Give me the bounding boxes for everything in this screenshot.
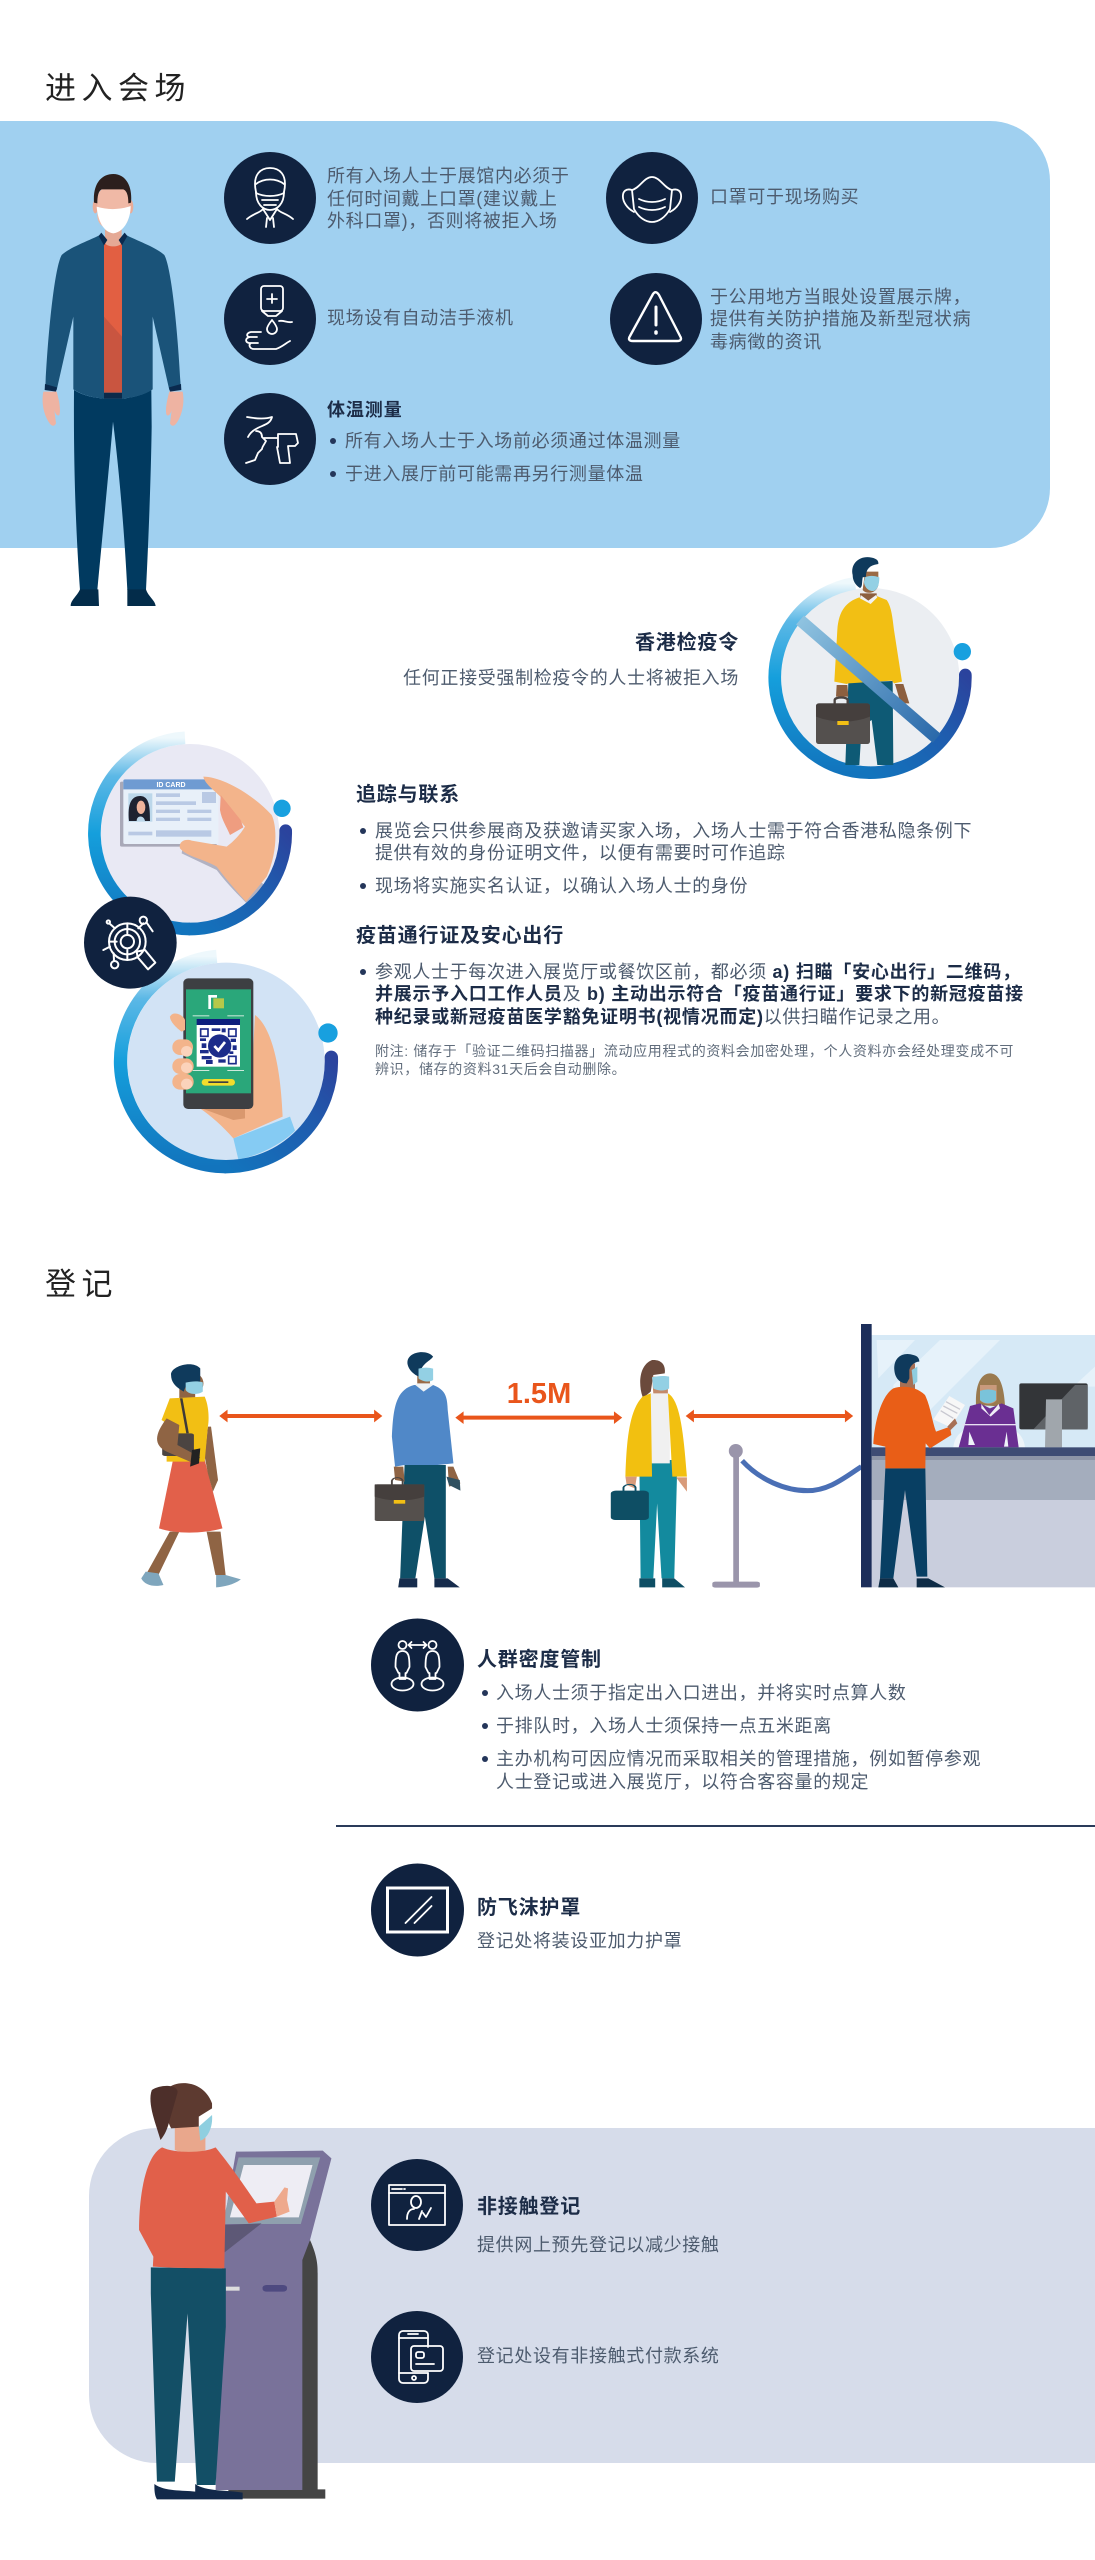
heading: sneeze guard: 防飞沫护罩 xyxy=(477,1896,581,1919)
distance arrows xyxy=(219,1410,853,1424)
bullet list: temperature xyxy=(330,431,681,484)
bullet list: tracing: 提供有效的身份证明文件，以便有需要时可作追踪 xyxy=(375,843,786,863)
item: masks on sale xyxy=(606,152,859,244)
figure: man with briefcase xyxy=(375,1352,460,1587)
icon: face and thermometer xyxy=(224,393,316,485)
bullet list: vaccine pass xyxy=(360,962,1024,1027)
icon: browser with person xyxy=(371,2159,463,2251)
icon: warning triangle xyxy=(610,273,702,365)
icon: surgical mask xyxy=(606,152,698,244)
text: masks purchasable: 口罩可于现场购买 xyxy=(710,187,859,207)
bullet list: vaccine pass: 参观人士于每次进入展览厅或餐饮区前，都必须 xyxy=(375,962,773,982)
section: tracing and contact xyxy=(356,782,1024,1077)
bullet list: tracing xyxy=(360,821,972,896)
text: sanitizer provided: 现场设有自动洁手液机 xyxy=(327,308,514,328)
bullet list: vaccine pass: 及 b) 主动出示符合「疫苗通行证」要求下的新冠疫苗接 xyxy=(563,984,1024,1004)
text: notices: 于公用地方当眼处设置展示牌， xyxy=(710,287,971,307)
text: online pre-registration: 提供网上预先登记以减少接触 xyxy=(477,2235,720,2255)
heading: tracing: 追踪与联系 xyxy=(356,782,460,806)
heading: vaccine pass: 疫苗通行证及安心出行 xyxy=(356,923,564,947)
illustration: quarantine no-entry man xyxy=(775,557,971,773)
bullet list: temperature: 所有入场人士于入场前必须通过体温测量 xyxy=(345,431,681,451)
item: crowd density xyxy=(371,1618,981,1792)
heading: registration: 登记 xyxy=(45,1267,118,1302)
text: notices: 毒病徵的资讯 xyxy=(710,332,822,352)
icon: protective screen xyxy=(371,1864,464,1956)
figure: receptionist xyxy=(953,1373,1025,1447)
item: sneeze guard xyxy=(371,1864,682,1956)
illustration: ID card and QR scan circles xyxy=(84,738,338,1167)
bullet list: temperature: 于进入展厅前可能需再另行测量体温 xyxy=(345,464,644,484)
text: quarantine rule: 任何正接受强制检疫令的人士将被拒入场 xyxy=(403,668,739,688)
bullet list: tracing: 现场将实施实名认证，以确认入场人士的身份 xyxy=(375,876,748,896)
icon: phone and card xyxy=(371,2311,463,2403)
kiosk xyxy=(216,2151,331,2499)
booth pillar xyxy=(861,1324,872,1587)
text: contactless payment: 登记处设有非接触式付款系统 xyxy=(477,2346,720,2366)
item: hand sanitizer xyxy=(224,273,514,365)
illustration: ID card circle: ID CARD xyxy=(156,782,186,789)
heading: HK quarantine: 香港检疫令 xyxy=(635,630,739,654)
icon: person with mask xyxy=(224,152,316,244)
illustration: standing man in mask xyxy=(43,174,183,606)
illustration: registration counter xyxy=(861,1324,1095,1587)
bullet list: vaccine pass: 以供扫瞄作记录之用。 xyxy=(764,1007,950,1027)
panel: contactless xyxy=(89,2128,1095,2463)
heading: enter venue: 进入会场 xyxy=(45,71,191,106)
bullet list: crowd control: 人士登记或进入展览厅，以符合客容量的规定 xyxy=(496,1772,869,1792)
heading: contactless registration: 非接触登记 xyxy=(477,2195,581,2218)
text: temperature heading: 体温测量 xyxy=(327,400,403,420)
monitor xyxy=(1019,1383,1088,1447)
text: notices: 提供有关防护措施及新型冠状病 xyxy=(710,309,971,329)
bullet list: vaccine pass: 种纪录或新冠疫苗医学豁免证明书(视情况而定) xyxy=(375,1006,764,1027)
illustration: ID card circle xyxy=(94,738,291,929)
illustration: woman at kiosk xyxy=(139,2083,331,2499)
item: temperature check xyxy=(224,393,681,485)
bullet list: crowd control: 于排队时，入场人士须保持一点五米距离 xyxy=(496,1716,832,1736)
text: mask rule: 外科口罩)，否则将被拒入场 xyxy=(327,211,558,231)
text: mask rule: 任何时间戴上口罩(建议戴上 xyxy=(327,189,558,209)
illustration: queue with social distancing xyxy=(141,1352,861,1588)
item: online registration xyxy=(371,2159,720,2255)
bullet list: tracing: 展览会只供参展商及获邀请买家入场，入场人士需于符合香港私隐条例下 xyxy=(375,821,972,841)
item: face mask required xyxy=(224,152,570,244)
stanchion with rope xyxy=(712,1444,861,1588)
panel: entry measures xyxy=(0,121,1050,548)
bullet list: crowd control: 主办机构可因应情况而采取相关的管理措施，例如暂停参观 xyxy=(496,1749,981,1769)
item: notices xyxy=(610,273,971,365)
bullet list: vaccine pass: 并展示予入口工作人员 xyxy=(375,983,563,1004)
text: mask rule: 所有入场人士于展馆内必须于 xyxy=(327,166,570,186)
text: footnote: 辨识，储存的资料31天后会自动删除。 xyxy=(375,1061,626,1077)
bullet list: crowd control xyxy=(482,1683,981,1792)
counter xyxy=(872,1447,1095,1587)
item: contactless payment xyxy=(371,2311,720,2403)
icon: two people at distance xyxy=(371,1618,464,1712)
figure: woman walking xyxy=(141,1364,241,1587)
figure: woman in yellow cardigan xyxy=(611,1360,687,1587)
label: 1.5M distance: 1.5M xyxy=(507,1378,571,1410)
icon: contact tracing xyxy=(84,897,177,989)
heading: crowd control: 人群密度管制 xyxy=(477,1647,602,1671)
illustration: QR phone circle xyxy=(121,956,338,1167)
text: sneeze guard: 登记处将装设亚加力护罩 xyxy=(477,1931,682,1951)
text: footnote: 附注: 储存于「验证二维码扫描器」流动应用程式的资料会加密处理，个人资料亦会经处理变成不可 xyxy=(375,1043,1014,1059)
figure: woman xyxy=(139,2083,290,2499)
text: HK quarantine xyxy=(403,630,739,688)
bullet list: vaccine pass: a) 扫瞄「安心出行」二维码， xyxy=(773,962,1021,982)
bullet list: crowd control: 入场人士须于指定出入口进出，并将实时点算人数 xyxy=(496,1683,907,1703)
figure: man at counter xyxy=(873,1354,965,1587)
icon: sanitizer dispenser xyxy=(224,273,316,365)
